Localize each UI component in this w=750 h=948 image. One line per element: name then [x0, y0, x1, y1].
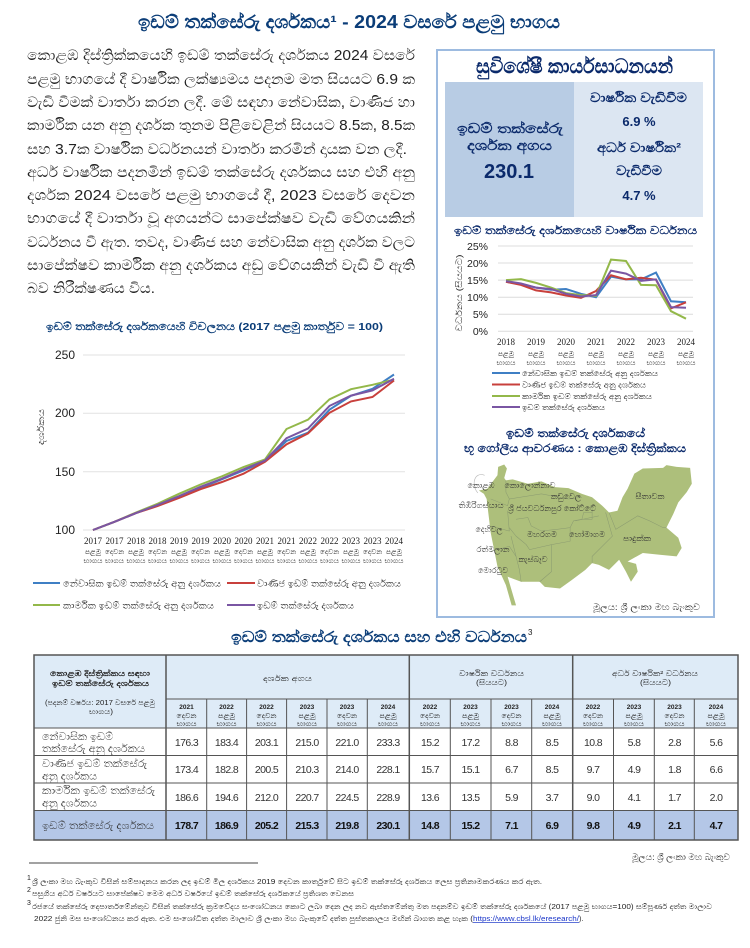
table row: commercial: 210.3: [295, 764, 319, 776]
table header text: කොළඹ දිස්ත්‍රික්කය සඳහා: [50, 668, 151, 680]
chart: annual growth: 2018: [497, 337, 516, 347]
KPI: growth rates: වැඩිවීම: [616, 163, 663, 178]
table row: residential: 15.2: [421, 737, 440, 749]
table period headers: 2022: [219, 704, 234, 711]
KPI: growth rates: 4.7 %: [622, 188, 656, 203]
intro text block: වැඩි වීමක් වාර්තා කරන ලදී. මේ සඳහා නේවාසික, වාණිජ හා: [27, 93, 415, 111]
chart: index movement: [33, 348, 405, 612]
x axis labels: භාගය: [191, 558, 210, 565]
map: Colombo district: සීතාවක: [635, 492, 665, 501]
table period headers: භාගය: [624, 721, 644, 728]
legend: annual growth: [492, 368, 659, 412]
map: Colombo district: කඩුවෙල: [551, 492, 581, 502]
table row: residential: 176.3: [175, 737, 199, 749]
table period headers: භාගය: [176, 721, 197, 728]
table row: industrial: 5.9: [505, 792, 519, 804]
map: Colombo district: [458, 464, 701, 613]
table row: total: 4.9: [628, 820, 641, 832]
intro text block: දර්ශක 2024 වසරේ පළමු භාගයේ දී, 2023 වසරේ දෙවන: [27, 186, 415, 205]
chart: annual growth: 2021: [587, 337, 605, 347]
table row: commercial: 9.7: [587, 764, 600, 776]
x axis labels: භාගය: [256, 558, 275, 565]
x axis labels: 2022: [299, 536, 317, 546]
table row: residential: 8.5: [546, 737, 559, 749]
intro text block: කොළඹ දිස්ත්‍රික්කයෙහි ඉඩම් තක්සේරු දර්ශකය 2024 වසරේ: [27, 46, 415, 65]
table period headers: භාගය: [378, 721, 398, 728]
table row: industrial: 13.6: [421, 792, 440, 804]
table: index and growth: [34, 655, 738, 840]
table period headers: භාගය: [297, 721, 317, 728]
table row: industrial: අනු දර්ශකය: [42, 796, 97, 810]
chart: index movement: 150: [55, 465, 75, 479]
table period headers: භාගය: [216, 721, 237, 728]
table row: industrial: 212.0: [255, 792, 279, 804]
intro text block: [27, 46, 416, 297]
table row: commercial: අනු දර්ශකය: [42, 770, 97, 784]
table period headers: 2023: [340, 704, 355, 711]
map: Colombo district: කොළඹ: [468, 481, 495, 491]
x axis labels: [84, 536, 404, 565]
table row: total: 15.2: [461, 820, 480, 832]
table row: industrial: 224.5: [335, 792, 359, 804]
table row: residential: 17.2: [461, 737, 480, 749]
intro text block: පළමු භාගයේ දී වාර්ෂික ලක්ෂ්‍යමය පදනම මත සියයට 6.9 ක: [27, 70, 415, 89]
map title: [464, 426, 686, 457]
x axis labels: භාගය: [148, 558, 167, 565]
footnotes: 3: [27, 900, 31, 907]
x axis labels: 2020: [213, 536, 232, 546]
x axis labels: 2021: [256, 536, 274, 546]
KPI: growth rates: අර්ධ වාර්ෂික²: [597, 139, 681, 157]
table header text: වාර්ෂික වර්ධනය: [459, 668, 525, 678]
table row: residential: 5.6: [710, 737, 723, 749]
x axis labels: 2017: [84, 536, 102, 546]
intro text block: සාපේක්ෂව කාර්මික අනු දර්ශකය අඩු වේගයකින් වැඩි වී ඇති: [27, 256, 415, 275]
x axis labels: දෙවන: [363, 549, 383, 556]
table source: මූලය: ශ්‍රී ලංකා මහ බැංකුව: [631, 852, 731, 863]
footnotes: [27, 875, 712, 924]
x axis labels: පළමු: [128, 549, 144, 557]
x axis labels: 2021: [278, 536, 296, 546]
table row: industrial: 220.7: [295, 792, 319, 804]
x axis labels: 2020: [234, 536, 253, 546]
table row: commercial: 6.6: [710, 764, 723, 776]
footnotes: ).: [579, 916, 583, 923]
table row: commercial: වාණිජ ඉඩම් තක්සේරු: [42, 756, 148, 770]
table row: commercial: 182.8: [215, 764, 239, 776]
x axis labels: පළමු: [85, 549, 101, 557]
chart: annual growth: 2024: [677, 337, 696, 347]
map: Colombo district: මහරගම: [527, 530, 557, 539]
table row: total: 215.3: [295, 820, 319, 832]
x axis labels: පළමු: [214, 549, 230, 557]
legend: annual growth: කාර්මික ඉඩම් තක්සේරු අනු දර්ශකය: [522, 391, 653, 402]
table header text: (සියයට): [640, 678, 672, 687]
table period headers: 2023: [300, 704, 315, 711]
x axis labels: 2023: [364, 536, 382, 546]
table row: residential: 8.8: [505, 737, 519, 749]
map: Colombo district: කැස්බෑව: [518, 554, 548, 564]
x axis labels: 2019: [192, 536, 210, 546]
table period headers: 2024: [381, 704, 396, 711]
footnotes: 2022 ජුනි මස සංශෝධනය කර ඇත. එම සංශෝධිත දත්ත මාලාව ශ්‍රී ලංකා මහ බැංකුවේ දත්ත පුස්තකාලය මඟින් බාගත කළ හැක (: [34, 915, 474, 924]
table row: commercial: 15.1: [461, 764, 480, 776]
table period headers: භාගය: [706, 721, 726, 728]
table period headers: භාගය: [664, 721, 685, 728]
table row: total: [42, 818, 723, 832]
map source: මූලය: ශ්‍රී ලංකා මහ බැංකුව: [592, 602, 701, 613]
chart: annual growth: 20%: [467, 258, 488, 270]
x axis labels: 2018: [148, 536, 167, 546]
table row: total: 6.9: [546, 820, 559, 832]
table row: industrial: 2.0: [710, 792, 723, 804]
chart: annual growth: [454, 241, 696, 412]
map: Colombo district: මොරටුව: [478, 566, 508, 575]
table period headers: පළමු: [298, 713, 316, 721]
table row: residential: 221.0: [335, 737, 359, 749]
KPI: growth rates: වාර්ෂික වැඩිවීම: [590, 89, 688, 105]
x axis labels: භාගය: [126, 558, 146, 565]
x axis labels: 2018: [127, 536, 146, 546]
chart title: index movement: ඉඩම් තක්සේරු දර්ශකයෙහි විචලනය (2017 පළමු කාර්තුව = 100): [46, 319, 383, 335]
map: Colombo district: පාදුක්ක: [623, 533, 652, 543]
x axis labels: පළමු: [171, 549, 187, 557]
table period headers: 2024: [545, 704, 560, 711]
x axis labels: භාගය: [298, 558, 318, 565]
x axis labels: භාගය: [212, 558, 232, 565]
map: Colombo district: ශ්‍රී ජයවර්ධනපුර කෝට්ටේ: [508, 503, 596, 513]
KPI: index value: 230.1: [484, 161, 534, 183]
x axis labels: දෙවන: [191, 549, 211, 556]
table period headers: පළමු: [380, 713, 397, 721]
chart: index movement: 200: [55, 406, 75, 420]
panel heading: සුවිශේෂී කාර්යසාධනයන්: [476, 54, 673, 81]
chart: annual growth: භාගය: [676, 360, 696, 367]
legend: annual growth: නේවාසික ඉඩම් තක්සේරු අනු දර්ශකය: [522, 368, 659, 379]
table row: residential: 233.3: [376, 737, 400, 749]
map: Colombo district: රත්මලාන: [476, 544, 510, 555]
x axis labels: 2024: [385, 536, 404, 546]
legend: index movement: වාණිජ ඉඩම් තක්සේරු අනු දර්ශකය: [257, 578, 402, 590]
table heading: ඉඩම් තක්සේරු දර්ශකය සහ එහි වර්ධනය: [231, 628, 527, 647]
chart: annual growth: 5%: [473, 309, 488, 321]
map: Colombo district: කොලොන්නාව: [504, 480, 556, 491]
chart: index movement: දර්ශකය: [36, 408, 46, 445]
footnotes: රජයේ තක්සේරු දෙපාර්තමේන්තුව විසින් තක්සේරු ක්‍රමවේදය සංශෝධනය කොට ලබා දෙන ලද නව ඇස්තමේන්තු මත පදනම්ව ඉඩම් තක්සේරු දර්ශකයේ (2017 පළමු භාගය=100) සම්පූර්ණ දත්ත මාලාව: [32, 903, 712, 912]
chart: annual growth: භාගය: [496, 360, 516, 367]
chart: annual growth: පළමු: [528, 351, 544, 359]
table row: industrial: 194.6: [215, 792, 239, 804]
table row: commercial: 228.1: [376, 764, 400, 776]
table row: commercial: 214.0: [335, 764, 359, 776]
table row: total: 178.7: [175, 820, 199, 832]
table header text: අර්ධ වාර්ෂික² වර්ධනය: [612, 668, 699, 679]
x axis labels: පළමු: [343, 549, 359, 557]
x axis labels: භාගය: [105, 558, 124, 565]
table period headers: භාගය: [542, 721, 562, 728]
table row: residential: [42, 729, 723, 756]
x axis labels: පළමු: [257, 549, 273, 557]
table header text: භාගය): [89, 709, 113, 716]
footnotes: 2: [27, 887, 31, 894]
table period headers: භාගය: [420, 721, 440, 728]
table row: commercial: 200.5: [255, 764, 279, 776]
x axis labels: දෙවන: [234, 549, 254, 556]
intro text block: වර්ධනය වී ඇත. තවද, වාණිජ සහ නේවාසික අනු දර්ශක වලට: [27, 233, 416, 252]
table period headers: 2024: [709, 704, 724, 711]
table header text: දර්ශක අගය: [263, 673, 313, 684]
table period headers: 2023: [504, 704, 519, 711]
legend: index movement: ඉඩම් තක්සේරු දර්ශකය: [257, 600, 355, 610]
table row: total: 14.8: [421, 820, 440, 832]
table row: residential: 215.0: [295, 737, 319, 749]
legend: annual growth: වාණිජ ඉඩම් තක්සේරු අනු දර්ශකය: [522, 379, 647, 390]
table heading: 3: [528, 628, 533, 637]
table row: industrial: 186.6: [175, 792, 199, 804]
table header text: [45, 668, 699, 716]
table row: commercial: 173.4: [175, 764, 199, 776]
KPI: growth rates: 6.9 %: [622, 114, 656, 129]
legend: index movement: කාර්මික ඉඩම් තක්සේරු අනු දර්ශකය: [63, 600, 215, 612]
chart: annual growth: 25%: [467, 241, 488, 253]
intro text block: භාගයේ දී වාර්තා වූ අගයන්ට සාපේක්ෂව වැඩි වේගයකින්: [27, 209, 415, 228]
intro text block: සහ 3.7ක වාර්ෂික වර්ධනයන් වාර්තා කරමින් දායක වන ලදී.: [27, 140, 407, 158]
table header text: (පදනම් වර්ෂය: 2017 වසරේ පළමු: [45, 699, 155, 708]
table row: residential: තක්සේරු අනු දර්ශකය: [42, 741, 145, 756]
table period headers: දෙවන: [176, 713, 197, 720]
table row: total: 9.8: [587, 820, 600, 832]
x axis labels: පළමු: [386, 549, 402, 557]
legend: annual growth: ඉඩම් තක්සේරු දර්ශකය: [522, 402, 606, 412]
table row: residential: 203.1: [255, 737, 279, 749]
KPI: index value: [445, 82, 574, 217]
map: Colombo district: හෝමාගම: [569, 529, 605, 539]
table row: commercial: 6.7: [505, 764, 519, 776]
table row: industrial: 9.0: [587, 792, 600, 804]
table row: total: 230.1: [376, 820, 400, 832]
table period headers: භාගය: [460, 721, 481, 728]
table period headers: 2023: [463, 704, 478, 711]
table period headers: [176, 704, 726, 728]
table period headers: 2022: [423, 704, 438, 711]
chart: index movement: 100: [55, 523, 75, 537]
chart: annual growth: 10%: [467, 292, 488, 304]
table row: residential: නේවාසික ඉඩම්: [42, 729, 113, 743]
table period headers: 2023: [667, 704, 682, 711]
x axis labels: පළමු: [300, 549, 316, 557]
chart: annual growth: පළමු: [588, 351, 604, 359]
table row: commercial: 8.5: [546, 764, 559, 776]
KPI: index value: ඉඩම් තක්සේරු: [457, 120, 565, 137]
KPI: growth rates: [574, 82, 703, 217]
map: Colombo district: තිඹිරිගස්යාය: [458, 500, 504, 510]
chart: annual growth: 2020: [557, 337, 576, 347]
x axis labels: දෙවන: [277, 549, 297, 556]
table row: residential: 183.4: [215, 737, 239, 749]
x axis labels: දෙවන: [148, 549, 168, 556]
chart: annual growth: භාගය: [586, 360, 606, 367]
table row: industrial: 1.7: [668, 792, 682, 804]
table period headers: පළමු: [462, 713, 479, 721]
x axis labels: භාගය: [277, 558, 296, 565]
table period headers: 2023: [627, 704, 642, 711]
table row: industrial: කාර්මික ඉඩම් තක්සේරු: [42, 783, 156, 797]
footnotes: ශ්‍රී ලංකා මහ බැංකුව විසින් සම්පාදනය කරන ලද ඉඩම් මිල දර්ශකය 2019 දෙවන කාර්තුවේ සිට ඉඩම් තක්සේරු දර්ශකය ලෙස ප්‍රතිනාමකරණය කර ඇත.: [32, 878, 542, 887]
chart: annual growth: භාගය: [646, 360, 666, 367]
intro text block: අර්ධ වාර්ෂික පදනමින් ඉඩම් තක්සේරු දර්ශකය සහ එහි අනු: [27, 163, 415, 182]
chart: annual growth: 15%: [467, 275, 488, 287]
table row: total: 4.7: [710, 820, 723, 832]
x axis labels: දෙවන: [320, 549, 340, 556]
table row: residential: 10.8: [584, 737, 603, 749]
x axis labels: භාගය: [84, 558, 103, 565]
footnotes: පසුගිය අර්ධ වර්ෂයට සාපේක්ෂව මෙම අර්ධ වර්ෂයේ ඉඩම් තක්සේරු දර්ශකයේ ප්‍රතිශත වෙනස: [32, 890, 354, 899]
table period headers: දෙවන: [256, 713, 277, 720]
x axis labels: 2019: [170, 536, 188, 546]
chart: annual growth: භාගය: [556, 360, 576, 367]
footnotes: 1: [27, 875, 31, 882]
table row: commercial: 4.9: [628, 764, 641, 776]
chart: annual growth: 2019: [527, 337, 546, 347]
table row: total: ඉඩම් තක්සේරු දර්ශකය: [42, 818, 154, 832]
table row: residential: 2.8: [668, 737, 682, 749]
table row: commercial: 1.8: [668, 764, 682, 776]
table period headers: දෙවන: [583, 713, 604, 720]
table row: total: 2.1: [668, 820, 682, 832]
x axis labels: භාගය: [384, 558, 404, 565]
table period headers: දෙවන: [337, 713, 358, 720]
table row: total: 205.2: [255, 820, 279, 832]
table period headers: දෙවන: [502, 713, 522, 720]
chart: annual growth: පළමු: [558, 351, 574, 359]
table header text: ඉඩම් තක්සේරු දර්ශකය: [52, 678, 150, 689]
chart: annual growth: පළමු: [678, 351, 694, 359]
table period headers: භාගය: [583, 721, 603, 728]
table period headers: දෙවන: [664, 713, 685, 720]
table row: commercial: 15.7: [421, 764, 440, 776]
chart: annual growth: භාගය: [616, 360, 636, 367]
table row: total: 219.8: [335, 820, 359, 832]
x axis labels: 2017: [106, 536, 124, 546]
table row: industrial: 4.1: [628, 792, 641, 804]
table period headers: පළමු: [544, 713, 561, 721]
table row: total: 7.1: [505, 820, 519, 832]
table period headers: භාගය: [256, 721, 277, 728]
table period headers: භාගය: [502, 721, 522, 728]
table row: industrial: 3.7: [546, 792, 559, 804]
intro text block: බව නිරීක්ෂණය විය.: [27, 279, 155, 297]
x axis labels: 2023: [342, 536, 360, 546]
table period headers: පළමු: [626, 713, 643, 721]
x axis labels: භාගය: [320, 558, 339, 565]
title: ඉඩම් තක්සේරු දර්ශකය¹ - 2024 වසරේ පළමු භාගය: [138, 11, 560, 34]
table period headers: භාගය: [337, 721, 357, 728]
table period headers: පළමු: [218, 713, 235, 721]
chart: annual growth: 2022: [617, 337, 635, 347]
chart: annual growth: භාගය: [526, 360, 546, 367]
map: Colombo district: දෙහිවල: [476, 525, 502, 535]
x axis labels: භාගය: [342, 558, 361, 565]
chart: annual growth: පළමු: [498, 351, 514, 359]
legend: index movement: [33, 578, 402, 612]
x axis labels: භාගය: [363, 558, 382, 565]
x axis labels: 2022: [320, 536, 338, 546]
table period headers: පළමු: [708, 713, 725, 721]
table header text: (සියයට): [476, 678, 508, 687]
table row: industrial: 228.9: [376, 792, 400, 804]
table period headers: 2022: [259, 704, 274, 711]
table row: commercial: [42, 756, 723, 784]
chart: annual growth: වර්ධනය (සියයට): [454, 254, 464, 332]
table row: residential: 5.8: [628, 737, 641, 749]
table period headers: දෙවන: [420, 713, 441, 720]
table period headers: 2022: [586, 704, 601, 711]
x axis labels: දෙවන: [105, 549, 125, 556]
chart: index movement: 250: [55, 348, 75, 362]
map title: භූ ගෝලීය ආවරණය : කොළඹ දිස්ත්‍රික්කය: [464, 441, 686, 457]
legend: index movement: නේවාසික ඉඩම් තක්සේරු අනු දර්ශකය: [63, 578, 222, 590]
panel: key achievements: [437, 50, 714, 617]
chart: annual growth: පළමු: [618, 351, 634, 359]
chart: annual growth: 0%: [473, 326, 488, 338]
table period headers: 2021: [179, 704, 194, 711]
KPI: index value: දර්ශක අගය: [467, 137, 552, 155]
chart: annual growth: පළමු: [648, 351, 664, 359]
x axis labels: භාගය: [170, 558, 189, 565]
footnotes: https://www.cbsl.lk/eresearch/: [473, 916, 579, 923]
table row: industrial: [42, 783, 723, 810]
annual growth chart title: ඉඩම් තක්සේරු දර්ශකයෙහි වාර්ෂික වර්ධනය: [454, 223, 698, 238]
chart: annual growth: 2023: [647, 337, 666, 347]
table row: total: 186.9: [215, 820, 239, 832]
x axis labels: භාගය: [234, 558, 253, 565]
table row: industrial: 13.5: [461, 792, 480, 804]
map title: ඉඩම් තක්සේරු දර්ශකයේ: [506, 426, 646, 441]
intro text block: කාර්මික යන අනු දර්ශක තුනම පිළිවෙළින් සියයට 8.5ක, 8.5ක: [27, 116, 415, 135]
